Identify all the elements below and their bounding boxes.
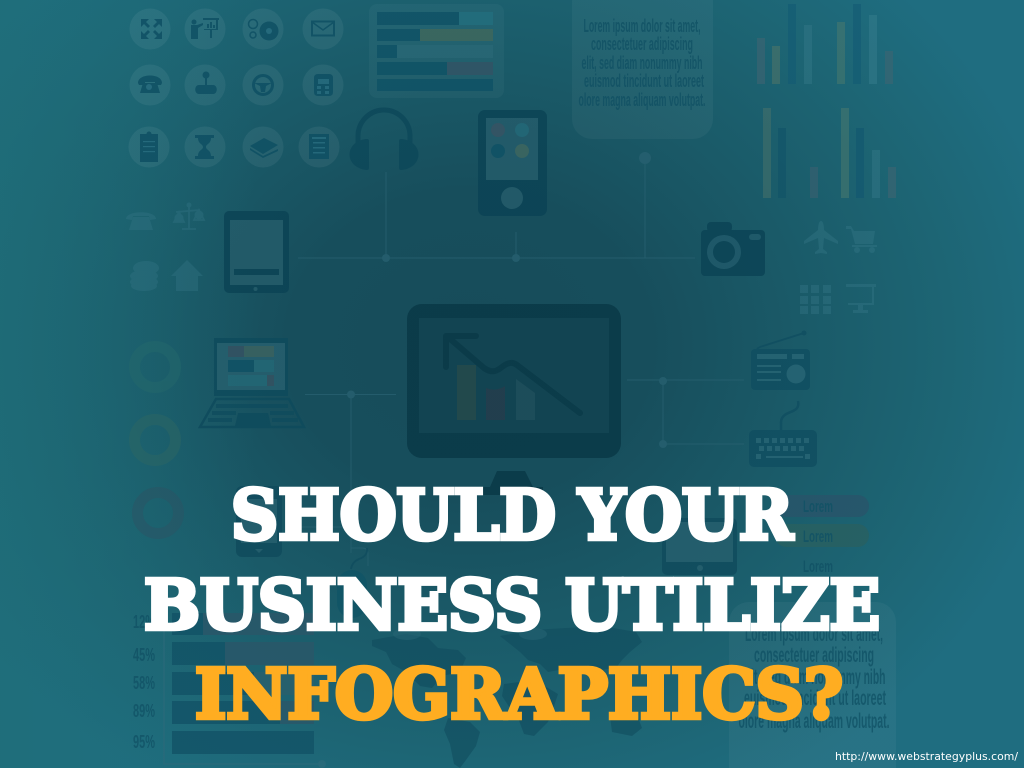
bar chart: percentages: 95% [133, 732, 155, 752]
icon: bottom phone [236, 486, 282, 557]
panel: lorem callout top: Lorem ipsum dolor sit amet, [584, 16, 700, 36]
icon: radio [751, 330, 810, 390]
plain icons: right column [800, 221, 877, 314]
legend pills: Lorem [803, 527, 833, 546]
bar chart: percentages: 89% [133, 701, 155, 721]
icon: monitor with chart [407, 304, 621, 495]
title: line 1: SHOULD YOUR [231, 476, 793, 556]
map pins [393, 628, 547, 640]
bar charts: top right [757, 4, 896, 198]
bar chart: percentages: 45% [133, 645, 155, 665]
panel: lorem callout top: euismod tincidunt ut laoreet [584, 71, 704, 91]
panel: lorem callout top: olore magna aliquam volutpat. [578, 90, 706, 110]
panel: lorem callout top [572, 0, 713, 139]
title: line 3: INFOGRAPHICS? [195, 655, 843, 735]
icon: camera [701, 222, 765, 276]
bar panel: top [369, 4, 504, 98]
panel: lorem callout bottom: consectetuer adipiscing [754, 644, 874, 667]
icon grid: circled icons [128, 8, 344, 168]
icon: media player [478, 110, 547, 216]
icon: headphones [350, 110, 418, 170]
connector lines: left [300, 390, 396, 566]
bar chart: percentages [133, 600, 326, 768]
legend pills: Lorem [803, 497, 833, 516]
connector lines: right [627, 377, 744, 448]
panel: lorem callout bottom [729, 602, 896, 768]
panel: lorem callout top: elit, sed diam nonummy nibh [582, 53, 702, 73]
panel: lorem callout top: consectetuer adipiscing [591, 34, 693, 54]
plain icons: left column [126, 202, 204, 291]
source url: http://www.webstrategyplus.com/ [835, 750, 1018, 763]
title: line 2: BUSINESS UTILIZE [144, 566, 880, 646]
icon: tablet [224, 211, 289, 293]
donut charts [134, 346, 178, 534]
legend pills: Lorem [803, 557, 833, 576]
bar chart: percentages: 12% [133, 612, 155, 632]
icon: keyboard [749, 401, 817, 467]
icon: right tablet [662, 518, 737, 575]
panel: lorem callout bottom: Lorem ipsum dolor sit amet, [745, 623, 883, 646]
icon: mouse [337, 548, 367, 618]
connector lines: top [298, 152, 695, 262]
world map [372, 626, 642, 768]
panel: lorem callout bottom: euismod tincidunt ut laoreet [744, 687, 886, 710]
legend pills [775, 495, 869, 576]
icon: laptop [200, 338, 304, 427]
panel: lorem callout bottom: elit, sed diam nonummy nibh [742, 666, 886, 689]
bar chart: percentages: 58% [133, 673, 155, 693]
